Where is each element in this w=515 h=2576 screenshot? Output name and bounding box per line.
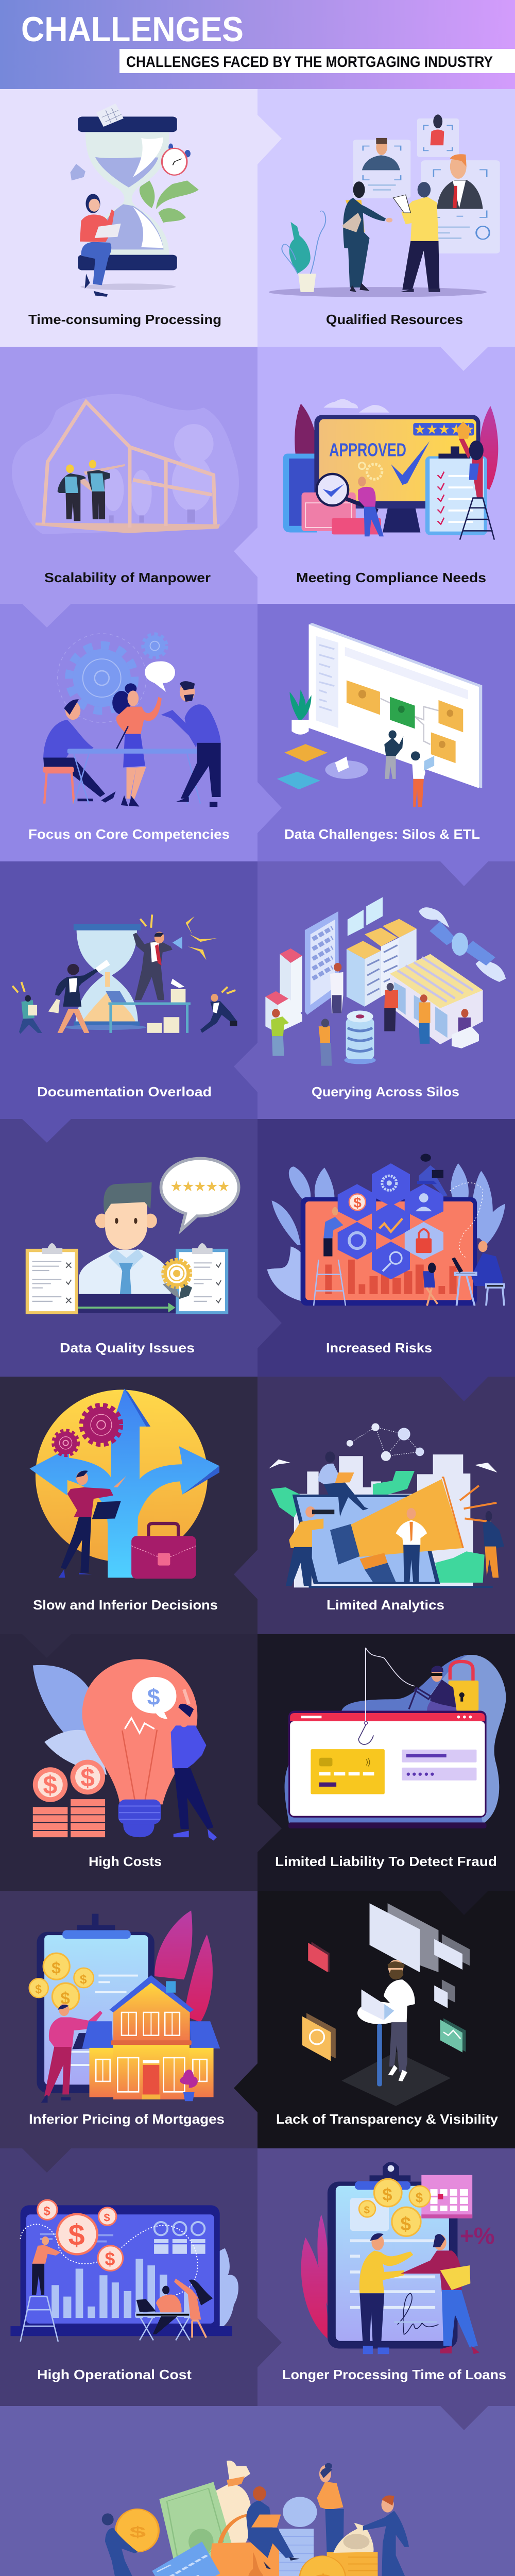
network [347, 1423, 424, 1461]
illustration: approved monitor: ★★★★★ [415, 422, 474, 436]
man with coin [102, 2509, 159, 2576]
hexagons: $ [353, 1195, 362, 1211]
gears [58, 634, 166, 722]
login fields [402, 1750, 476, 1781]
illustration: candidates and recruiters [269, 114, 500, 297]
calendar [96, 104, 124, 127]
bars [52, 2259, 191, 2318]
panel: Qualified Resources [258, 89, 515, 347]
small courier [19, 995, 42, 1034]
leaves [33, 1665, 98, 1752]
people [314, 1154, 504, 1306]
construction workers [58, 460, 125, 521]
panel: Data Quality Issues [0, 1119, 258, 1377]
percent mark: +% [460, 2223, 495, 2249]
man left yellow [359, 2233, 413, 2354]
clipboard [425, 446, 487, 535]
speech bubble [145, 661, 175, 692]
coins: $ [60, 1989, 70, 2008]
label: Meeting Compliance Needs [296, 570, 486, 585]
boss on desk [133, 931, 182, 1000]
panel: Querying Across Silos [258, 861, 515, 1119]
desk and papers [106, 979, 191, 1033]
banknote [159, 2482, 232, 2576]
panel: Focus on Core Competencies [0, 604, 258, 861]
seated woman [246, 2486, 300, 2569]
data block rows [390, 954, 483, 1044]
speech bubble with stars: ★★★★★ [171, 1180, 229, 1194]
illustration: handshake over contract [301, 2162, 495, 2354]
panel: Inferior Pricing of Mortgages [0, 1891, 258, 2148]
coins [359, 2179, 431, 2236]
alarm clock [162, 144, 191, 175]
panel: Limited Analytics [258, 1377, 515, 1634]
label: Qualified Resources [326, 312, 463, 327]
portraits [362, 114, 483, 209]
left clipboard [26, 1243, 78, 1314]
calendar [421, 2175, 472, 2218]
coins: $ [382, 2185, 392, 2205]
man right maroon [401, 2234, 479, 2354]
hexagons [338, 1163, 443, 1279]
man with telescope [286, 1506, 334, 1586]
leaves [271, 1163, 505, 1245]
megaphone [330, 1478, 463, 1582]
coins: $ [364, 2205, 370, 2216]
floor tiles [277, 744, 368, 789]
right clipboard [176, 1243, 228, 1314]
label: High Costs [89, 1854, 162, 1869]
man [41, 2004, 102, 2103]
leaves [140, 180, 199, 223]
arrow [78, 1302, 176, 1313]
pink cards [302, 493, 356, 531]
illustration: megaphone and city [269, 1423, 504, 1588]
label: Scalability of Manpower [44, 570, 211, 585]
illustration: team around a table [43, 634, 221, 807]
label: Data Challenges: Silos & ETL [284, 826, 480, 842]
coins and stacks: $ [80, 1763, 95, 1792]
label: Querying Across Silos [312, 1084, 459, 1099]
illustration: approved monitor: APPROVED [329, 440, 406, 461]
satellite and clouds [419, 907, 506, 982]
briefcase [131, 1523, 196, 1579]
fishing line and hook [358, 1648, 415, 1744]
panel: Lack of Ideal Customer Experience [0, 2406, 515, 2576]
label: Lack of Transparency & Visibility [276, 2111, 499, 2127]
header band [0, 0, 515, 89]
ladder man [21, 2236, 61, 2342]
man with coin: $ [129, 2523, 146, 2541]
data cards [347, 681, 463, 763]
label: Time-consuming Processing [28, 312, 221, 327]
laptop [10, 2205, 232, 2336]
padlock bag [210, 2515, 288, 2576]
coins and stacks: $ [43, 1771, 57, 1800]
illustration: hourglass and hurried staff [12, 914, 237, 1034]
monitor [314, 415, 480, 509]
coins: $ [52, 1959, 61, 1977]
coral screen [301, 1197, 477, 1306]
padlock [449, 1662, 478, 1711]
illustration: reviewer with clipboards [26, 1158, 239, 1314]
house [82, 1975, 220, 2099]
leaves [271, 1471, 485, 1583]
illustration: lightbulb and coins [33, 1659, 217, 1840]
candidate cards [353, 118, 500, 253]
hourglass [64, 924, 146, 1030]
desk bar [78, 1294, 176, 1313]
standing man [396, 1508, 427, 1583]
app tiles [348, 910, 364, 936]
panel: Limited Liability To Detect Fraud [258, 1634, 515, 1891]
credit card [311, 1749, 385, 1794]
subtitle bar [119, 49, 515, 73]
desk team [135, 2279, 213, 2341]
sun disc [36, 1389, 208, 1562]
coins: $ [400, 2213, 411, 2234]
browser window [288, 1711, 487, 1828]
plant [282, 211, 325, 292]
woman [80, 194, 121, 297]
label: Limited Analytics [327, 1597, 444, 1613]
clipboard [37, 1914, 154, 2093]
red stacks [265, 948, 302, 1033]
coloured tiles [302, 1942, 466, 2061]
woman [48, 960, 110, 1033]
skyline [294, 1454, 473, 1587]
phone [305, 911, 339, 1015]
money bag [176, 2461, 251, 2576]
leaves [201, 2248, 238, 2333]
woman [112, 683, 162, 806]
coins [29, 1953, 94, 2010]
woman on ladder [457, 421, 494, 540]
people [384, 731, 434, 807]
panel: Documentation Overload [0, 861, 258, 1119]
pink leaves [154, 1910, 213, 2022]
man at standing desk [357, 1960, 415, 2086]
label: Longer Processing Time of Loans [282, 2367, 506, 2382]
envelope [70, 164, 85, 180]
speech bubble with stars [161, 1158, 239, 1230]
panel: Time-consuming Processing [0, 89, 258, 347]
label: High Operational Cost [37, 2367, 192, 2382]
bulb [82, 1659, 197, 1837]
panel: Lack of Transparency & Visibility [258, 1891, 515, 2148]
illustration: coral screen with hexagons [267, 1154, 505, 1306]
label: Limited Liability To Detect Fraud [275, 1854, 497, 1869]
coins: $ [43, 2205, 50, 2218]
illustration: timber house frame [12, 394, 239, 534]
hacker [409, 1666, 457, 1711]
illustration: phishing hook over browser [285, 1648, 506, 1828]
blue blob [285, 1655, 506, 1824]
label: Slow and Inferior Decisions [33, 1597, 218, 1613]
potted plant [180, 2070, 198, 2101]
floating panels [370, 1903, 470, 2008]
coins: $ [80, 1973, 87, 1987]
coins: $ [35, 1982, 42, 1996]
coins [38, 2200, 123, 2270]
man right [363, 2495, 413, 2576]
woman right [483, 1511, 504, 1578]
dotted path [21, 2224, 198, 2298]
illustration: crossroads arrows [29, 1389, 219, 1579]
gold coins [300, 2552, 377, 2576]
illustration: clipboard, coins and house [29, 1910, 220, 2103]
panel: High Operational Cost [0, 2148, 258, 2406]
illustration: approved monitor [283, 399, 498, 540]
credit card [152, 2541, 220, 2576]
title: CHALLENGES [21, 10, 244, 49]
seated man [43, 699, 116, 804]
woman on top [283, 2463, 344, 2554]
man [171, 1704, 217, 1840]
magnifier [317, 474, 377, 511]
leaves [295, 404, 498, 500]
woman in navy coat [342, 181, 392, 292]
illustration: money and customers [102, 2461, 413, 2576]
coins and stacks [33, 1760, 105, 1837]
label: Inferior Pricing of Mortgages [29, 2111, 225, 2127]
award badge [163, 1260, 192, 1299]
database cylinder [344, 1010, 376, 1064]
server racks [347, 919, 417, 1007]
label: Increased Risks [326, 1340, 432, 1355]
table [67, 726, 208, 804]
illustration: hourglass with woman and laptop [70, 104, 199, 297]
plant [290, 689, 312, 735]
label: Documentation Overload [37, 1084, 212, 1099]
clipboard [328, 2162, 457, 2348]
alert marks [12, 914, 235, 993]
inspector [358, 477, 384, 536]
dollar thought bubble: $ [147, 1685, 160, 1710]
standing man [161, 681, 221, 807]
sitting woman [318, 1451, 369, 1517]
arrows [29, 1389, 219, 1578]
side tablet [283, 453, 317, 533]
paper planes [269, 1460, 497, 1472]
money sack [333, 2523, 374, 2553]
running man [200, 994, 237, 1033]
label: Focus on Core Competencies [28, 826, 230, 842]
coins: $ [416, 2191, 423, 2206]
coins: $ [68, 2219, 85, 2252]
panel: High Costs [0, 1634, 258, 1891]
silver coin stack [279, 2529, 314, 2576]
panel: Scalability of Manpower [0, 347, 258, 604]
gears [53, 1405, 121, 1455]
illustration: man with floating screens [302, 1903, 470, 2106]
dollar thought bubble [132, 1677, 176, 1719]
coins: $ [104, 2211, 110, 2224]
label: Data Quality Issues [60, 1340, 195, 1355]
man with laptop [59, 1470, 127, 1578]
illustration: isometric data board [277, 623, 482, 807]
panel: Increased Risks [258, 1119, 515, 1377]
clouds [323, 399, 389, 413]
panel: Slow and Inferior Decisions [0, 1377, 258, 1634]
workers [271, 963, 479, 1066]
dashboard tiles [40, 2222, 205, 2254]
illustration: laptop bar chart with coins [10, 2200, 238, 2342]
panel: Longer Processing Time of Loans [258, 2148, 515, 2406]
man bust [79, 1182, 171, 1294]
panel: Data Challenges: Silos & ETL [258, 604, 515, 861]
man in yellow shirt [393, 182, 440, 292]
coins: $ [105, 2249, 115, 2269]
pink leaves [301, 2214, 329, 2340]
tablet screen [293, 1495, 493, 1588]
panel: Meeting Compliance Needs [258, 347, 515, 604]
illustration: isometric servers [265, 897, 506, 1066]
